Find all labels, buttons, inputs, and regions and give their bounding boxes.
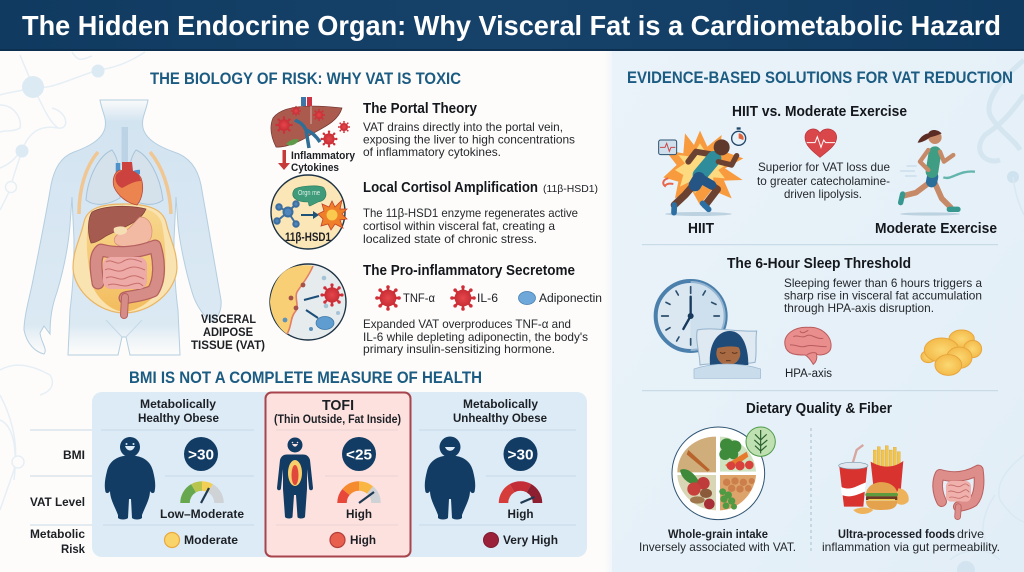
text block: local cortisol amplification: (11β-HSD1) — [543, 183, 598, 195]
label: inflammatory cytokines: Inflammatory — [291, 150, 356, 162]
text block: local cortisol amplification: Local Cortisol Amplification — [363, 180, 538, 196]
icon: liver with cytokines — [271, 97, 356, 174]
text: whole-grain intake: Inversely associated with VAT. — [639, 541, 796, 554]
label: visceral adipose tissue: ADIPOSE — [203, 325, 253, 339]
text: whole-grain intake: Whole-grain intake — [668, 528, 769, 541]
text: ultra-processed foods: drive — [957, 528, 984, 541]
risk: moderate — [164, 532, 238, 548]
small intestine — [103, 257, 147, 289]
legend: secreted molecules: IL-6 — [477, 293, 498, 305]
icon: gut — [938, 470, 979, 517]
label: inflammatory cytokines: Cytokines — [291, 162, 339, 174]
column: metabolically unhealthy obese: Metabolically — [463, 397, 538, 411]
row labels: BMI — [63, 448, 85, 462]
row labels: VAT Level — [30, 495, 85, 509]
text block: pro-inflammatory secretome: IL-6 while depleting adiponectin, the body's — [363, 331, 588, 344]
text: ultra-processed foods — [822, 528, 1000, 554]
lungs — [86, 150, 163, 204]
anatomical body illustration — [24, 100, 221, 355]
column: metabolically unhealthy obese: Unhealthy Obese — [453, 411, 547, 425]
text block: pro-inflammatory secretome: Expanded VAT overproduces TNF-α and — [363, 318, 571, 331]
figure: obese — [425, 436, 475, 520]
stomach — [114, 217, 152, 247]
trachea — [122, 127, 128, 165]
column: metabolically unhealthy obese: High — [508, 507, 534, 521]
text block: portal theory: The Portal Theory — [363, 101, 477, 117]
panel: HIIT vs moderate exercise: HIIT vs. Moderate Exercise — [732, 104, 907, 120]
text block: portal theory — [363, 101, 575, 159]
labels: HIIT and moderate exercise: HIIT — [688, 221, 714, 237]
panel: dietary quality and fiber — [639, 401, 1000, 554]
legend: secreted molecules — [375, 285, 602, 311]
badge: BMI over 30: >30 — [188, 446, 214, 464]
text: HIIT benefit: to greater catecholamine- — [757, 175, 890, 188]
icon: clock and sleeping person — [656, 281, 761, 378]
text: whole-grain intake — [639, 528, 796, 554]
panel: dietary quality and fiber: Dietary Quality & Fiber — [746, 401, 892, 417]
panel: HIIT vs moderate exercise — [659, 104, 997, 237]
badge: BMI over 30 — [184, 437, 218, 471]
panel: 6-hour sleep threshold: The 6-Hour Sleep Threshold — [727, 256, 911, 272]
rib fat arcs — [79, 152, 171, 214]
badge: BMI over 30: >30 — [508, 446, 534, 464]
figure: thin with visceral fat — [277, 438, 313, 518]
text block: portal theory: VAT drains directly into the portal vein, — [363, 121, 563, 134]
text block: local cortisol amplification: localized state of chronic stress. — [363, 233, 537, 246]
risk: very high: Very High — [503, 533, 558, 547]
row labels — [30, 448, 85, 556]
text: sleep effect: Sleeping fewer than 6 hours triggers a — [784, 277, 983, 290]
icon: secretome circle — [270, 264, 346, 340]
text: HIIT benefit: Superior for VAT loss due — [758, 161, 890, 174]
column: TOFI: (Thin Outside, Fat Inside) — [274, 414, 401, 426]
icon: moderate runner — [900, 130, 975, 216]
text block: pro-inflammatory secretome — [363, 263, 602, 356]
text block: pro-inflammatory secretome: primary insulin-sensitizing hormone. — [363, 343, 555, 356]
comparison table — [30, 392, 587, 557]
text block: portal theory: exposing the liver to high concentrations — [363, 134, 575, 146]
gauge: high — [342, 486, 376, 503]
text: sleep effect — [784, 277, 983, 315]
arrow: cytokines down — [278, 150, 290, 170]
labels: HIIT and moderate exercise — [688, 221, 997, 237]
label: inflammatory cytokines — [291, 150, 356, 174]
label: visceral adipose tissue: TISSUE (VAT) — [191, 338, 265, 352]
text: sleep effect: sharp rise in visceral fat accumulation — [784, 290, 982, 302]
text: HIIT benefit: driven lipolysis. — [784, 188, 862, 201]
column: metabolically healthy obese — [105, 397, 244, 548]
panel: 6-hour sleep threshold — [656, 256, 983, 380]
labels: HIIT and moderate exercise: Moderate Exercise — [875, 221, 997, 237]
liver — [88, 206, 146, 243]
gauge: low to moderate — [185, 486, 219, 503]
icon: 11beta-HSD1 enzyme circle — [271, 175, 347, 249]
column: metabolically healthy obese: Healthy Obese — [138, 411, 219, 425]
section heading: BMI: BMI IS NOT A COMPLETE MEASURE OF HEALTH — [129, 369, 482, 387]
legend: secreted molecules: Adiponectin — [539, 293, 602, 305]
body silhouette — [24, 100, 221, 355]
text block: local cortisol amplification — [363, 180, 598, 246]
risk: high: High — [350, 533, 376, 547]
heart — [113, 162, 143, 205]
section heading: biology of risk: THE BIOLOGY OF RISK: WHY VAT IS TOXIC — [150, 70, 461, 88]
TOFI highlight column — [266, 392, 410, 556]
text: ultra-processed foods: Ultra-processed foods — [838, 528, 955, 541]
label: visceral adipose tissue — [191, 312, 265, 352]
text: HIIT benefit — [757, 161, 890, 201]
figure: obese — [105, 437, 155, 520]
risk: very high — [484, 532, 558, 548]
gauge: very high — [504, 486, 538, 503]
colon — [96, 246, 159, 315]
column: metabolically healthy obese: Metabolically — [140, 397, 216, 411]
icon: balanced plate — [672, 427, 775, 520]
icon: 11beta-HSD1 enzyme circle: Orgn me — [298, 190, 320, 197]
risk: high — [330, 532, 376, 548]
icon: heart with pulse — [805, 129, 837, 157]
icon: 11beta-HSD1 enzyme circle: 11β-HSD1 — [285, 232, 332, 244]
badge: BMI under 25 — [342, 437, 376, 471]
badge: BMI over 30 — [504, 437, 538, 471]
icon: HIIT sprinter — [659, 127, 746, 216]
text: ultra-processed foods: inflammation via gut permeability. — [822, 541, 1000, 554]
icon: ultra-processed foods — [839, 445, 909, 514]
icon: brain with HPA-axis label — [785, 327, 832, 380]
text block: portal theory: of inflammatory cytokines. — [363, 146, 501, 159]
label: visceral adipose tissue: VISCERAL — [201, 312, 256, 326]
icon: brain with HPA-axis label: HPA-axis — [785, 368, 832, 380]
text block: local cortisol amplification: The 11β-HSD1 enzyme regenerates active — [363, 207, 578, 220]
risk: moderate: Moderate — [184, 533, 238, 547]
legend: secreted molecules: TNF-α — [403, 293, 435, 305]
row labels: Risk — [61, 542, 85, 556]
visceral fat — [73, 204, 177, 313]
column: TOFI: High — [346, 507, 372, 521]
row labels: Metabolic — [30, 527, 85, 541]
title: The Hidden Endocrine Organ: Why Visceral Fat is a Cardiometabolic Hazard — [22, 10, 1001, 41]
column: metabolically unhealthy obese — [425, 397, 558, 548]
icon: fat cluster — [921, 330, 982, 375]
badge: BMI under 25: <25 — [346, 446, 372, 464]
text block: local cortisol amplification: cortisol within visceral fat, creating a — [363, 220, 556, 233]
column: metabolically healthy obese: Low–Moderate — [160, 507, 244, 521]
column: TOFI — [274, 397, 401, 548]
text block: pro-inflammatory secretome: The Pro-inflammatory Secretome — [363, 263, 575, 279]
column: TOFI: TOFI — [322, 397, 354, 414]
header banner — [0, 0, 1024, 51]
text: sleep effect: through HPA-axis disruption. — [784, 302, 934, 315]
